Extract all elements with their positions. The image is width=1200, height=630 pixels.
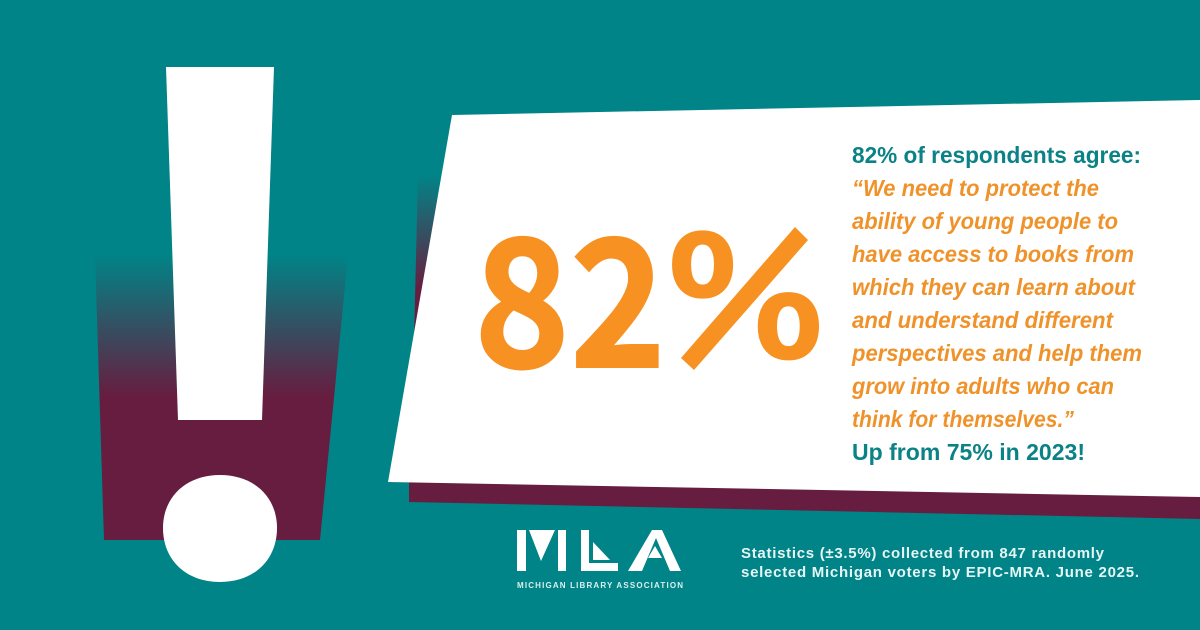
- text block: survey quote: “We need to protect the: [852, 175, 1099, 201]
- text block: survey quote: have access to books from: [852, 241, 1134, 267]
- digits: 82: [474, 162, 666, 418]
- text block: survey quote: think for themselves.”: [852, 406, 1074, 432]
- text block: source note: Statistics (±3.5%) collected from 847 randomly: [741, 545, 1105, 562]
- text block: source note: selected Michigan voters by EPIC-MRA. June 2025.: [741, 564, 1139, 581]
- text block: survey quote: Up from 75% in 2023!: [852, 439, 1085, 465]
- big statistic: [480, 227, 819, 370]
- text block: source note: [741, 545, 1139, 581]
- text block: survey quote: 82% of respondents agree:: [852, 142, 1141, 168]
- logo: Michigan Library Association: [517, 530, 683, 590]
- logo wordmark: MICHIGAN LIBRARY ASSOCIATION: [517, 581, 683, 590]
- panel: white statistic card: [388, 100, 1200, 497]
- text block: survey quote: and understand different: [852, 307, 1114, 333]
- icon: exclamation mark: [163, 67, 277, 582]
- percent sign: %: [667, 198, 824, 399]
- text block: survey quote: [851, 142, 1142, 465]
- logo mark: M: [517, 530, 566, 571]
- logo mark: L: [581, 530, 618, 571]
- logo mark: A: [628, 530, 681, 571]
- panel shadow: [409, 175, 1200, 519]
- text block: survey quote: grow into adults who can: [851, 373, 1114, 399]
- exclamation mark shadow: [95, 255, 348, 540]
- text block: survey quote: ability of young people to: [852, 208, 1118, 234]
- percent slash: [681, 227, 808, 370]
- text block: survey quote: which they can learn about: [852, 274, 1136, 300]
- text block: survey quote: perspectives and help them: [851, 340, 1142, 366]
